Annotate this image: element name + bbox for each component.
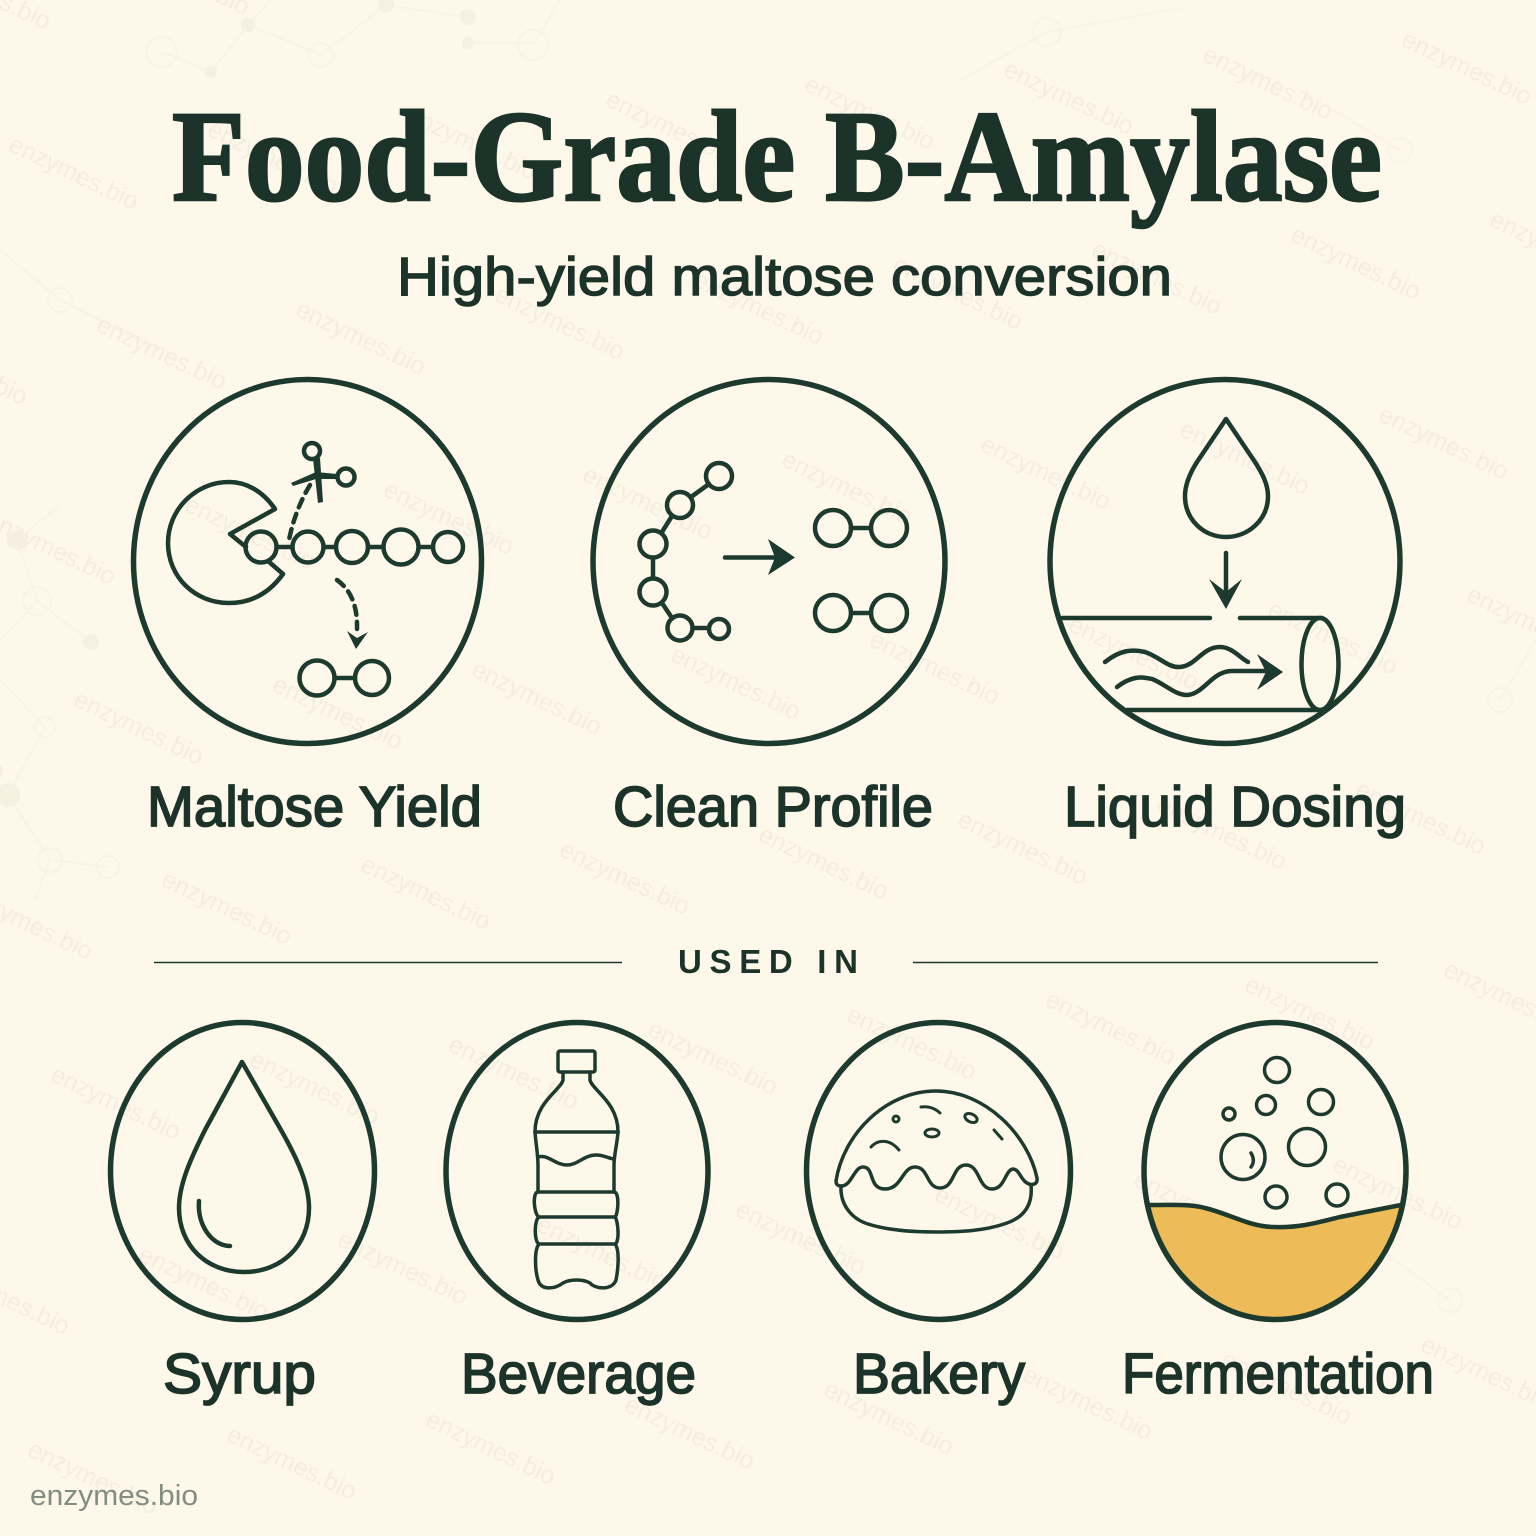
text: enzymes.bio [1152,790,1291,876]
text: enzymes.bio [1018,1360,1157,1446]
icon: liquid dosing circle [1050,380,1400,744]
text: enzymes.bio [69,685,208,771]
icon: bun [836,1091,1037,1232]
text: enzymes.bio [402,100,541,186]
icon: clean profile circle [593,380,945,744]
icon: liquid surface [1150,1205,1401,1227]
text: enzymes.bio [1286,220,1425,306]
subtitle: High-yield maltose conversion [397,247,1172,307]
text: enzymes.bio [467,655,606,741]
text: enzymes.bio [46,1060,185,1146]
text: enzymes.bio [134,1240,273,1326]
text: enzymes.bio [754,820,893,906]
text: enzymes.bio [92,310,231,396]
icon: flow waves with arrow [1105,647,1283,695]
icon: droplet [1185,419,1268,537]
text: enzymes.bio [689,265,828,351]
icon: maltose unit [300,660,389,696]
text: enzymes.bio [578,460,717,546]
text: enzymes.bio [1351,775,1490,861]
panel: maltose yield [134,380,482,744]
arrow: dashed release arrow [337,580,368,649]
label: bakery: Bakery [853,1342,1025,1406]
icon: scissors [291,443,354,503]
icon: enzyme pac-man [168,482,283,603]
text: enzymes.bio [643,1015,782,1101]
icon: maltose chain [246,530,463,564]
panel: bakery [806,1022,1070,1320]
panel: syrup [110,1022,374,1320]
section heading: used in: USED IN [678,943,858,980]
text: enzymes.bio [930,1180,1069,1266]
icon: bun sprinkles [871,1107,1002,1150]
text: enzymes.bio [4,130,143,216]
panel: fermentation [1144,1022,1406,1320]
text: enzymes.bio [842,1000,981,1086]
icon: starch chain [640,463,732,640]
text: enzymes.bio [203,115,342,201]
text: enzymes.bio [379,475,518,561]
icon: bottle [534,1051,618,1288]
text: enzymes.bio [1175,415,1314,501]
panel: clean profile [593,380,945,744]
text: enzymes.bio [421,1405,560,1491]
icon: syrup circle [110,1022,374,1320]
icon: maltose pairs [815,510,907,631]
text: enzymes.bio [555,835,694,921]
text: enzymes.bio [1198,40,1337,126]
text: enzymes.bio [800,70,939,156]
text: enzymes.bio [731,1195,870,1281]
text: enzymes.bio [23,1435,162,1521]
icon: bubbles [1221,1058,1348,1208]
icon: syrup drop [179,1062,309,1272]
text: enzymes.bio [1374,400,1513,486]
label: beverage: Beverage [461,1342,696,1406]
text: enzymes.bio [333,1225,472,1311]
label: syrup: Syrup [163,1342,316,1406]
text: enzymes.bio [1064,610,1203,696]
arrow: conversion arrow [725,539,795,575]
text: enzymes.bio [490,280,629,366]
text: enzymes.bio [1217,1345,1356,1431]
text: enzymes.bio [1041,985,1180,1071]
icon: liquid fill [1150,1205,1401,1319]
arrow: dashed cut arrow [289,485,310,540]
text: enzymes.bio [180,490,319,576]
text: enzymes.bio [777,445,916,531]
label: maltose yield: Maltose Yield [147,775,482,839]
label: fermentation: Fermentation [1122,1342,1434,1406]
text: enzymes.bio [865,625,1004,711]
panel: liquid dosing [1050,380,1400,744]
label: clean profile: Clean Profile [613,775,933,839]
text: enzymes.bio [819,1375,958,1461]
text: enzymes.bio [157,865,296,951]
icon: maltose yield circle [134,380,482,744]
brand footer: enzymes.bio [30,1480,198,1512]
text: enzymes.bio [1240,970,1379,1056]
text: enzymes.bio [1129,1165,1268,1251]
text: enzymes.bio [976,430,1115,516]
label: liquid dosing: Liquid Dosing [1064,775,1406,839]
text: enzymes.bio [245,1045,384,1131]
text: enzymes.bio [268,670,407,756]
icon: drop highlight [199,1201,230,1246]
text: enzymes.bio [356,850,495,936]
text: enzymes.bio [1328,1150,1467,1236]
text: enzymes.bio [532,1210,671,1296]
text: enzymes.bio [444,1030,583,1116]
text: enzymes.bio [222,1420,361,1506]
text: enzymes.bio [1397,25,1536,111]
text: enzymes.bio [620,1390,759,1476]
icon: pipe [1062,618,1338,710]
text: enzymes.bio [291,295,430,381]
text: enzymes.bio [1087,235,1226,321]
title: Food-Grade B-Amylase [172,85,1382,229]
text: enzymes.bio [953,805,1092,891]
icon: fermentation circle [1144,1022,1406,1320]
icon: bakery circle [806,1022,1070,1320]
text: enzymes.bio [601,85,740,171]
panel: beverage [446,1022,708,1320]
text: enzymes.bio [888,250,1027,336]
text: enzymes.bio [1263,595,1402,681]
arrow: dosing arrow [1209,553,1242,609]
text: enzymes.bio [999,55,1138,141]
icon: beverage circle [446,1022,708,1320]
text: enzymes.bio [666,640,805,726]
